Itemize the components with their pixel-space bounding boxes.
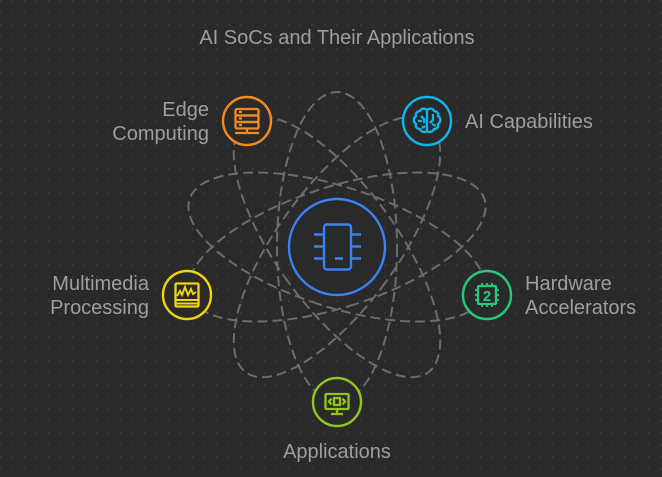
label: Edge Computing: Computing: [112, 123, 209, 145]
label: Hardware Accelerators: Accelerators: [525, 297, 636, 319]
node: Edge Computing: [223, 97, 271, 145]
orbit ellipses: [171, 86, 503, 408]
label: Multimedia Processing: Multimedia: [52, 273, 149, 295]
node: AI Capabilities: [403, 97, 451, 145]
node: Applications: [313, 378, 361, 426]
label: AI Capabilities: AI Capabilities: [465, 111, 593, 133]
node: Hardware Accelerators: [463, 271, 511, 319]
label: Applications: Applications: [283, 441, 391, 463]
label: Multimedia Processing: Processing: [50, 297, 149, 319]
node: Hardware Accelerators: 2: [483, 288, 491, 305]
central chip node: [289, 199, 385, 295]
label: Edge Computing: Edge: [162, 99, 209, 121]
node: Multimedia Processing: [163, 271, 211, 319]
title: AI SoCs and Their Applications: [199, 27, 475, 49]
label: Hardware Accelerators: Hardware: [525, 273, 612, 295]
